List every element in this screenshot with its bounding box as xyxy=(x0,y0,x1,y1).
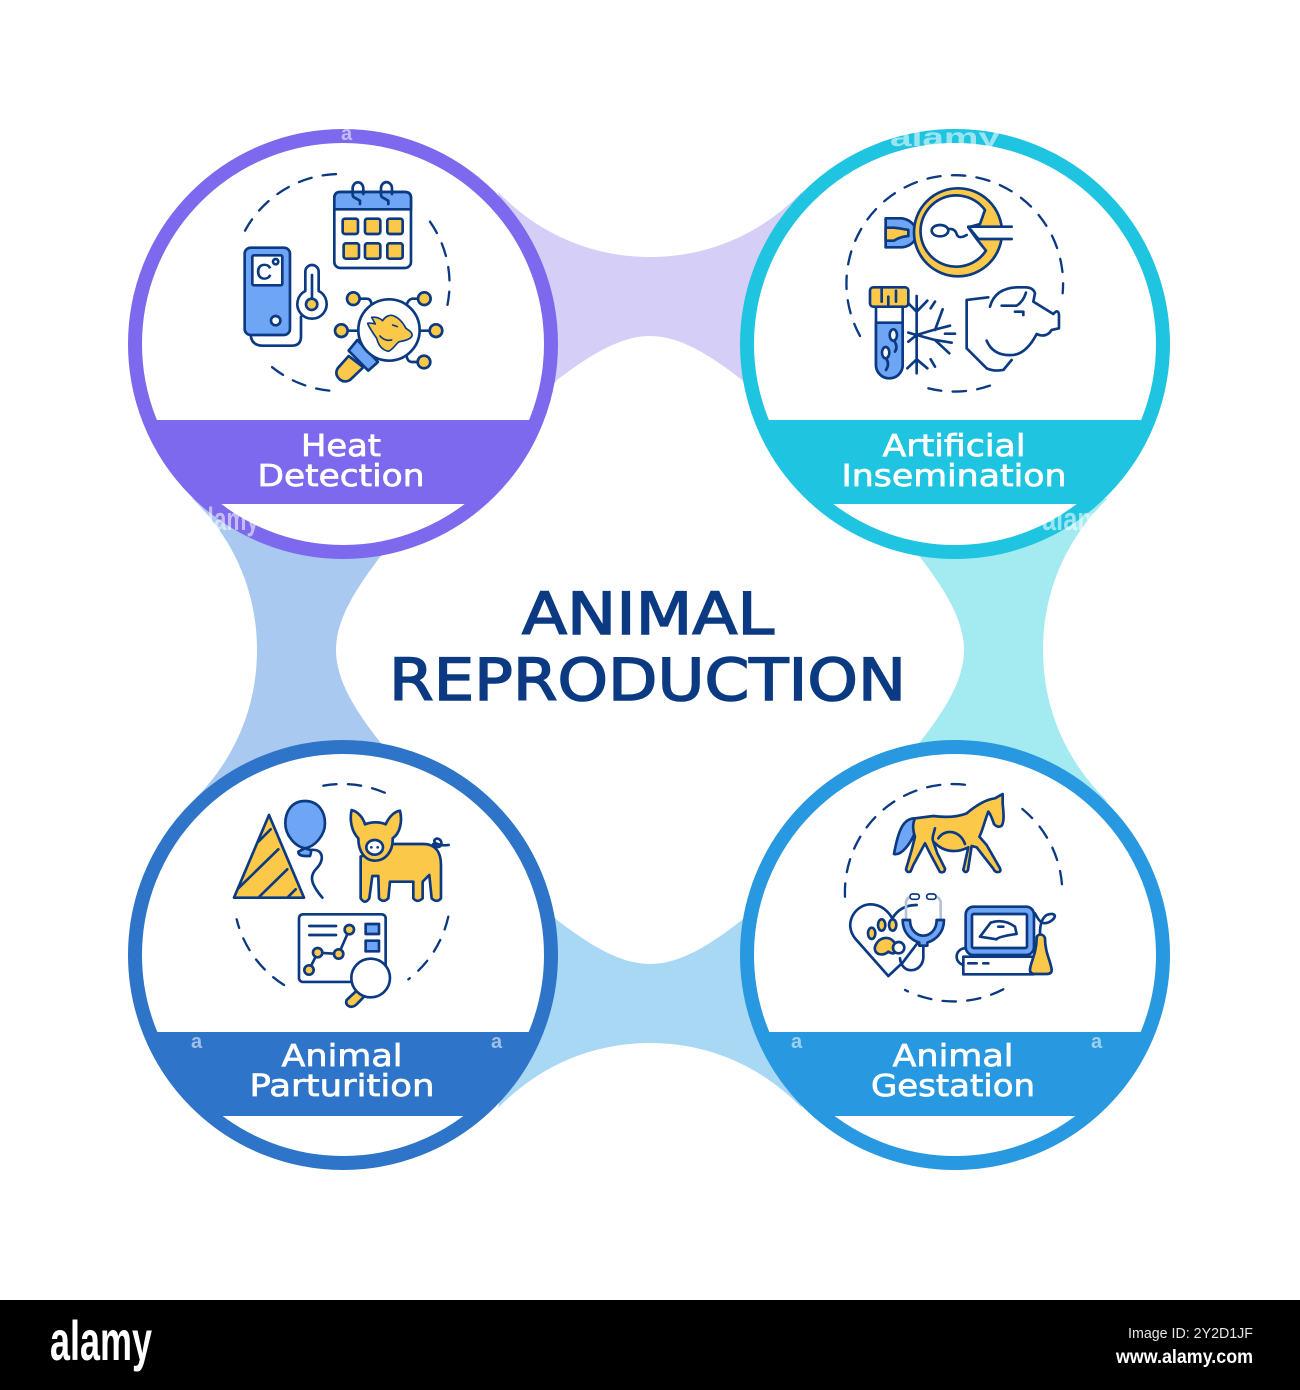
title: ANIMAL xyxy=(522,580,774,648)
label: animal parturition: Parturition xyxy=(250,1069,434,1104)
image id: Image ID: 2Y2D1JF xyxy=(1128,1325,1253,1342)
label: artificial insemination: Artificial xyxy=(882,429,1026,464)
icon: heat detection xyxy=(245,174,450,391)
connector: left xyxy=(192,498,400,802)
label: heat detection: Heat xyxy=(301,429,381,464)
icon: artificial insemination xyxy=(846,175,1063,392)
icon: heat detection: C xyxy=(256,259,272,284)
watermarks: a xyxy=(791,1031,803,1053)
label: heat detection: Detection xyxy=(258,459,424,494)
watermarks xyxy=(191,122,1103,1053)
panel: artificial insemination xyxy=(732,136,1182,552)
panel: animal parturition xyxy=(120,747,570,1163)
panel: animal gestation xyxy=(732,747,1182,1163)
watermarks: alamy xyxy=(195,501,259,537)
label: animal gestation: Animal xyxy=(892,1039,1014,1074)
watermarks: alam xyxy=(1042,501,1100,537)
watermarks: a xyxy=(1091,1031,1103,1053)
label: animal parturition: Animal xyxy=(282,1039,402,1074)
footer bar xyxy=(0,1300,1300,1390)
watermarks: a xyxy=(341,123,353,145)
connector: right xyxy=(900,498,1108,802)
icon: animal gestation xyxy=(845,784,1062,1001)
footer logo: alamy xyxy=(50,1309,152,1372)
connector: top xyxy=(498,192,802,400)
connector: bottom xyxy=(498,900,802,1108)
panel: heat detection xyxy=(120,136,570,552)
icon: animal parturition xyxy=(234,784,449,1007)
website: www.alamy.com xyxy=(1115,1347,1253,1368)
watermarks: alamy xyxy=(890,122,1001,152)
label: artificial insemination: Insemination xyxy=(842,459,1066,494)
title: REPRODUCTION xyxy=(389,646,906,714)
label: animal gestation: Gestation xyxy=(871,1069,1035,1104)
watermarks: a xyxy=(191,1031,203,1053)
watermarks: a xyxy=(491,1031,503,1053)
